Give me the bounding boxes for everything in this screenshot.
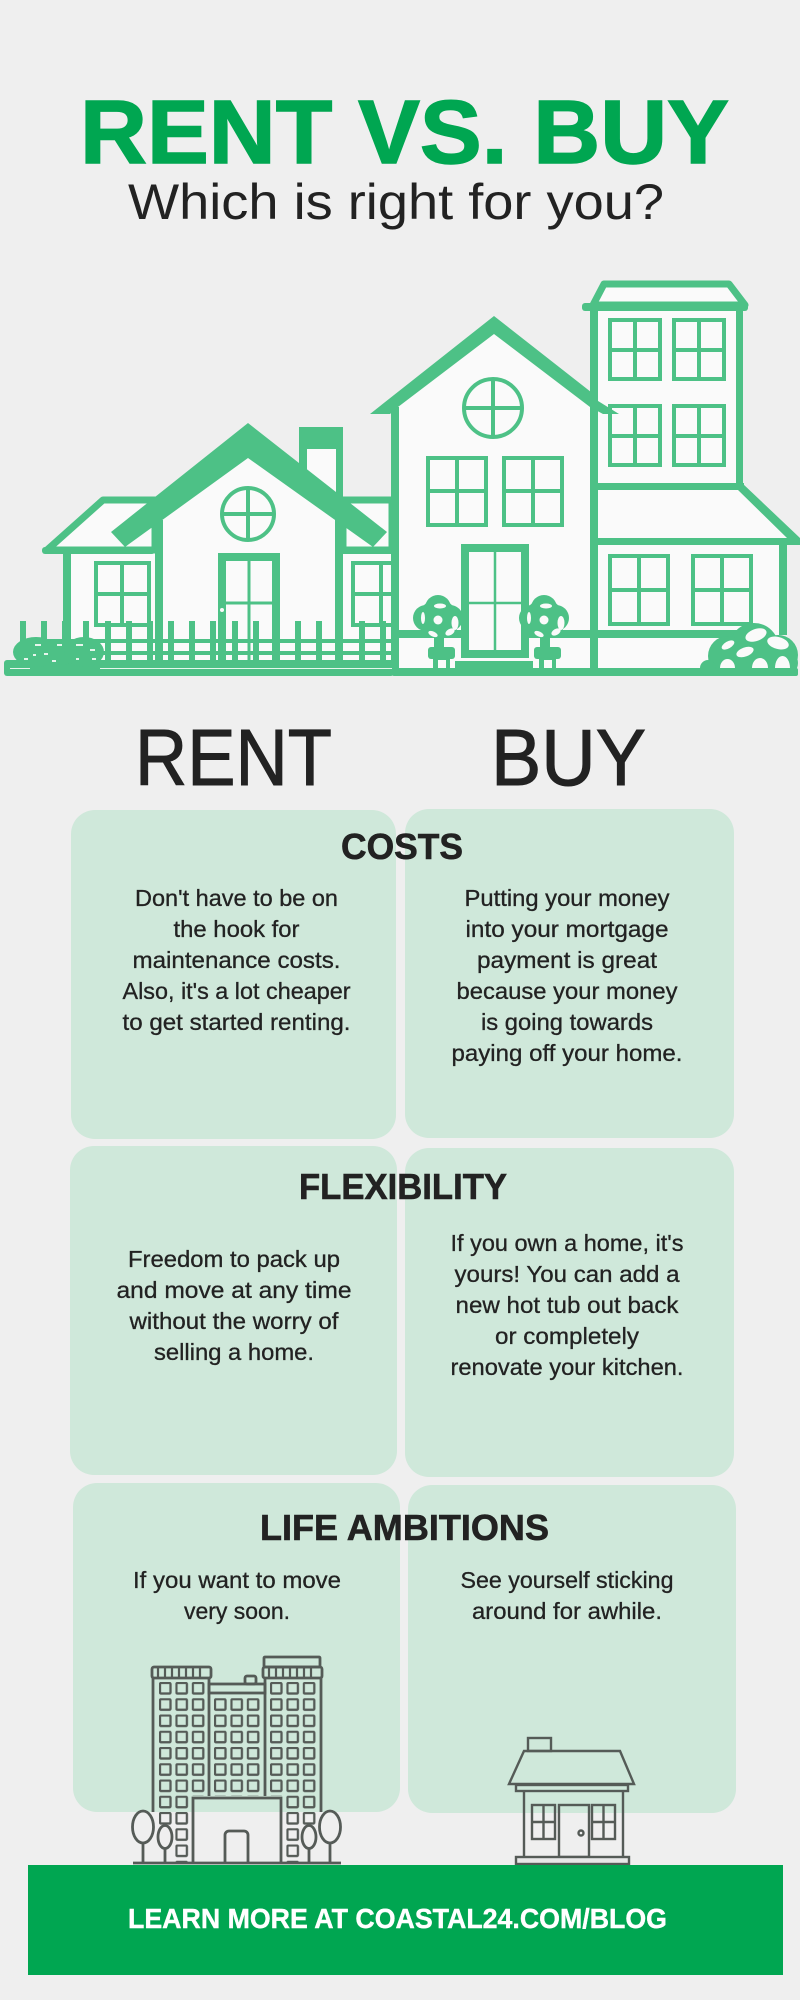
panel: flexibility buy: [405, 1148, 734, 1477]
text: life ambitions buy: See yourself sticking: [460, 1567, 674, 1593]
text: costs rent: Don't have to be on: [135, 885, 338, 911]
right tower: [582, 284, 800, 668]
panel: life ambitions buy: [408, 1485, 736, 1813]
text: costs buy: [452, 885, 682, 1066]
ground right: [392, 668, 798, 676]
text: costs buy: into your mortgage: [466, 916, 668, 942]
right bush: [700, 623, 798, 676]
heading: buy: BUY: [491, 713, 646, 802]
roof: [370, 316, 619, 414]
heading: costs: COSTS: [341, 826, 463, 867]
ground left: [4, 660, 394, 676]
text: life ambitions buy: around for awhile.: [472, 1598, 662, 1624]
round window: [222, 488, 274, 540]
subtitle: Which is right for you?: [128, 174, 664, 230]
text: flexibility rent: without the worry of: [128, 1308, 339, 1334]
text: costs buy: paying off your home.: [452, 1040, 682, 1066]
text: life ambitions rent: If you want to move: [133, 1567, 341, 1593]
text: costs buy: because your money: [456, 978, 678, 1004]
text: flexibility buy: [450, 1230, 684, 1380]
right window: [353, 563, 398, 625]
potted plant left: [413, 595, 463, 669]
roof: [111, 423, 387, 547]
text: life ambitions buy: [460, 1567, 674, 1624]
text: flexibility buy: renovate your kitchen.: [450, 1354, 684, 1380]
text: costs buy: payment is great: [477, 947, 658, 973]
text: costs buy: Putting your money: [464, 885, 670, 911]
text: costs buy: is going towards: [481, 1009, 653, 1035]
icon: apartment buildings: [132, 1657, 341, 1863]
heading: flexibility: FLEXIBILITY: [299, 1166, 507, 1207]
door: [220, 557, 276, 665]
text: flexibility buy: or completely: [495, 1323, 640, 1349]
text: flexibility buy: If you own a home, it's: [450, 1230, 684, 1256]
potted plant right: [519, 595, 569, 669]
text: costs rent: the hook for: [174, 916, 300, 942]
lower wing: [598, 483, 800, 668]
round window: [464, 379, 522, 437]
text: flexibility rent: [116, 1246, 352, 1365]
icon: small house: [509, 1738, 634, 1864]
text: flexibility buy: new hot tub out back: [456, 1292, 679, 1318]
bush: [13, 637, 104, 667]
text: costs rent: Also, it's a lot cheaper: [122, 978, 351, 1004]
door step: [455, 661, 533, 669]
text: life ambitions rent: [133, 1567, 341, 1624]
banner: [28, 1865, 783, 1975]
tower windows: [610, 320, 724, 465]
text: costs rent: to get started renting.: [122, 1009, 350, 1035]
trees: [132, 1811, 340, 1863]
upper windows: [428, 458, 562, 525]
panel: costs buy: [405, 809, 734, 1138]
panel: flexibility rent: [70, 1146, 397, 1475]
text: flexibility rent: selling a home.: [154, 1339, 314, 1365]
door: [465, 548, 525, 654]
text: costs rent: [122, 885, 351, 1035]
panel: costs rent: [71, 810, 396, 1139]
banner text: LEARN MORE AT COASTAL24.COM/BLOG: [128, 1903, 667, 1934]
heading: rent: RENT: [135, 713, 332, 802]
entrance: [193, 1798, 281, 1863]
left house: [4, 423, 398, 676]
fence: [20, 621, 392, 668]
panel: life ambitions rent: [73, 1483, 400, 1812]
text: costs rent: maintenance costs.: [132, 947, 340, 973]
left window: [96, 563, 149, 625]
text: flexibility rent: and move at any time: [116, 1277, 352, 1303]
text: flexibility rent: Freedom to pack up: [128, 1246, 340, 1272]
text: life ambitions rent: very soon.: [184, 1598, 290, 1624]
title: RENT VS. BUY: [80, 83, 729, 183]
illustration: row of houses: [4, 284, 800, 676]
text: flexibility buy: yours! You can add a: [454, 1261, 680, 1287]
middle house: [370, 316, 619, 669]
heading: life ambitions: LIFE AMBITIONS: [260, 1507, 549, 1548]
